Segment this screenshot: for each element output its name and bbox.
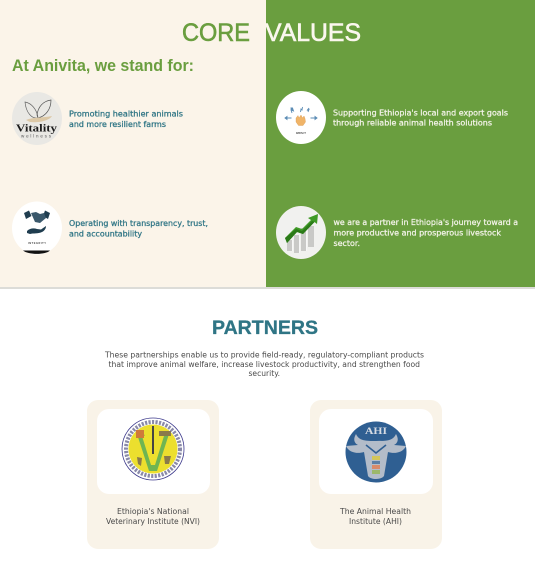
card: NVI: [87, 400, 219, 549]
text: local and export goals: Supporting Ethiopia's local and export goals: [333, 108, 508, 118]
title: CORE: [182, 19, 250, 47]
icon: growth chart: [276, 206, 326, 259]
subheading: At Anivita, we stand for:: [12, 56, 194, 75]
heading: partners: PARTNERS: [212, 317, 318, 339]
logo: AHI cow: [346, 422, 406, 482]
text: partners intro: These partnerships enable us to provide field-ready, regulatory-compliant products: [104, 350, 424, 360]
text: transparency: Operating with transparency, trust,: [69, 219, 208, 228]
label: NVI: [106, 507, 200, 526]
value: livestock partner: [276, 206, 518, 259]
panel: core values: [0, 0, 535, 289]
text: transparency: [69, 219, 208, 238]
text: transparency: and accountability: [69, 230, 143, 238]
text: healthier animals: and more resilient farms: [69, 120, 166, 129]
title: [182, 19, 361, 47]
icon: vitality wellness logo: wellness: [21, 134, 52, 138]
text: livestock partner: we are a partner in Ethiopia's journey toward a: [334, 218, 518, 227]
text: partners intro: that improve animal welfare, increase livestock productivity, and strengthen food: [108, 360, 420, 369]
label: AHI: [339, 507, 411, 526]
text: livestock partner: sector.: [334, 239, 360, 248]
logo: NVI seal: [122, 418, 184, 480]
icon: integrity handshake: INTEGRITY: [28, 241, 46, 245]
value: transparency: [12, 202, 208, 254]
label: NVI: Ethiopia's National: [117, 507, 189, 516]
text: healthier animals: [69, 110, 183, 129]
text: livestock partner: [334, 218, 518, 248]
label: AHI: The Animal Health: [339, 507, 411, 516]
text: partners intro: [104, 350, 424, 378]
text: healthier animals: Promoting healthier animals: [69, 110, 183, 118]
text: local and export goals: through reliable animal health solutions: [333, 118, 492, 128]
icon: impact hand: [276, 91, 326, 144]
text: partners intro: security.: [248, 369, 280, 378]
logo: AHI cow: AHI: [365, 426, 388, 436]
card: AHI: [310, 400, 442, 549]
icon: vitality wellness logo: Vitality: [16, 122, 58, 134]
title: VALUES: [265, 19, 361, 47]
value: healthier animals: [12, 92, 183, 145]
label: AHI: Institute (AHI): [349, 517, 402, 526]
text: livestock partner: more productive and prosperous livestock: [334, 228, 502, 238]
icon: vitality wellness logo: [12, 92, 62, 145]
label: NVI: Veterinary Institute (NVI): [106, 517, 200, 526]
text: local and export goals: [333, 108, 508, 128]
value: local and export goals: [276, 91, 508, 144]
panel: partners: [87, 317, 442, 549]
icon: impact hand: IMPACT: [296, 131, 306, 135]
icon: integrity handshake: [12, 202, 62, 254]
